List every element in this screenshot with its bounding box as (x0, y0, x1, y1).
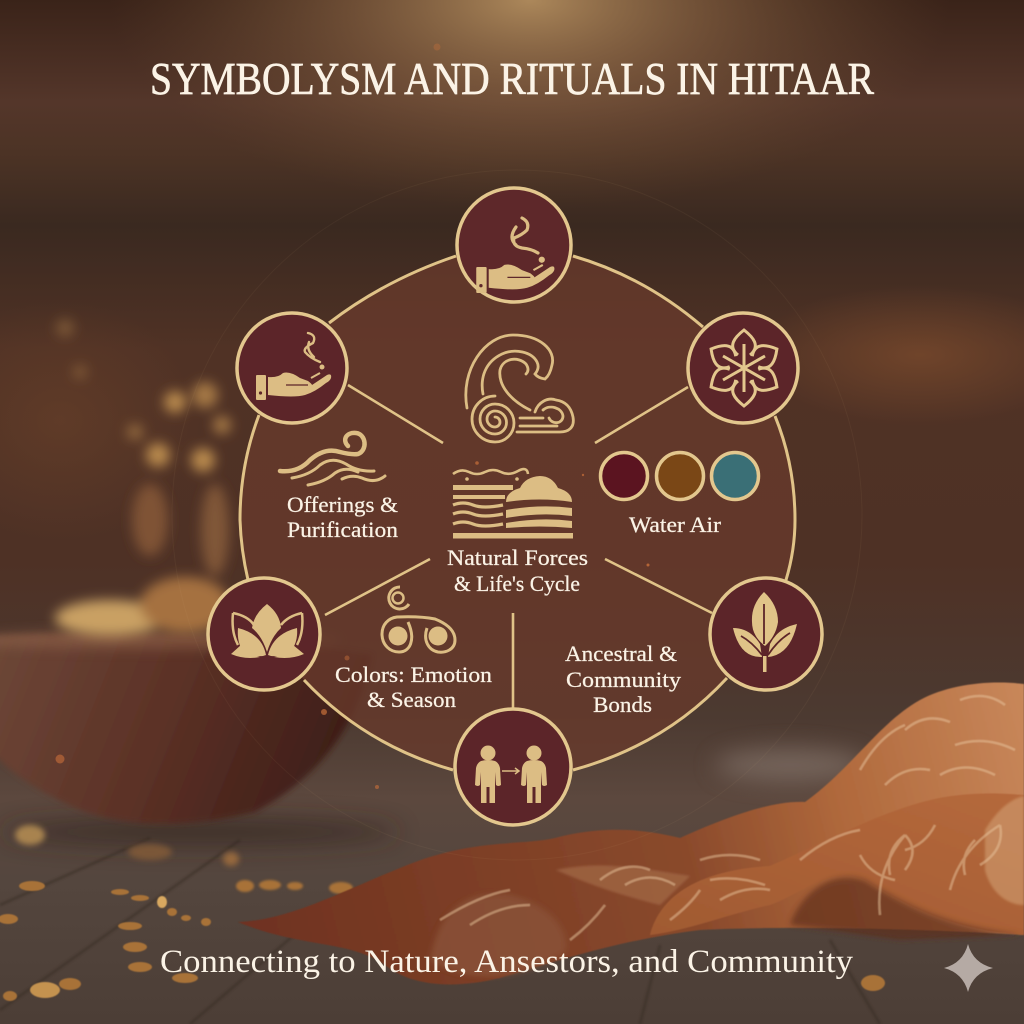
label: colors: & Season (367, 687, 456, 712)
faint outer ring (172, 170, 862, 860)
label: water air: Water Air (629, 512, 722, 537)
node: offering hand (top) (457, 188, 571, 302)
label: colors (335, 662, 492, 712)
label: natural forces: & Life's Cycle (454, 571, 580, 596)
node: flower (upper right) (688, 313, 798, 423)
ring arcs and spokes (240, 256, 795, 770)
label: natural forces: Natural Forces (447, 545, 588, 570)
bright blurred strip on table (715, 749, 865, 781)
title: SYMBOLYSM AND RITUALS IN HITAAR (150, 53, 874, 104)
grains spilling, blurred (55, 319, 231, 636)
scattered grains (0, 825, 885, 1001)
patterned cloth (238, 683, 1024, 984)
icon: sparkle star (944, 944, 993, 992)
icon: wave, spiral and cloud (466, 335, 573, 442)
icon: wind curl (280, 433, 385, 485)
footer caption: Connecting to Nature, Ansestors, and Community (160, 944, 854, 980)
table planks (0, 838, 880, 1024)
node: offering hand (upper left) (237, 313, 347, 423)
label: ancestral: Bonds (593, 692, 652, 717)
icon: water and earth layers (453, 469, 573, 538)
label: ancestral: Community (566, 667, 682, 692)
label: offerings: Purification (287, 517, 398, 542)
bowl (0, 631, 400, 846)
icon: colour swirl (382, 587, 455, 652)
node: lotus (left) (208, 578, 320, 690)
label: offerings: Offerings & (287, 492, 398, 517)
label: colors: Colors: Emotion (335, 662, 492, 687)
label: offerings (287, 492, 398, 542)
diagram panel: translucent maroon disc (240, 240, 795, 775)
swatches: three colour circles (600, 452, 758, 500)
label: ancestral: Ancestral & (565, 641, 678, 666)
node: two people (bottom) (455, 709, 571, 825)
embers (56, 44, 754, 789)
label: natural forces (447, 545, 588, 596)
node: leaf sprout (right) (710, 578, 822, 690)
label: ancestral (565, 641, 682, 717)
